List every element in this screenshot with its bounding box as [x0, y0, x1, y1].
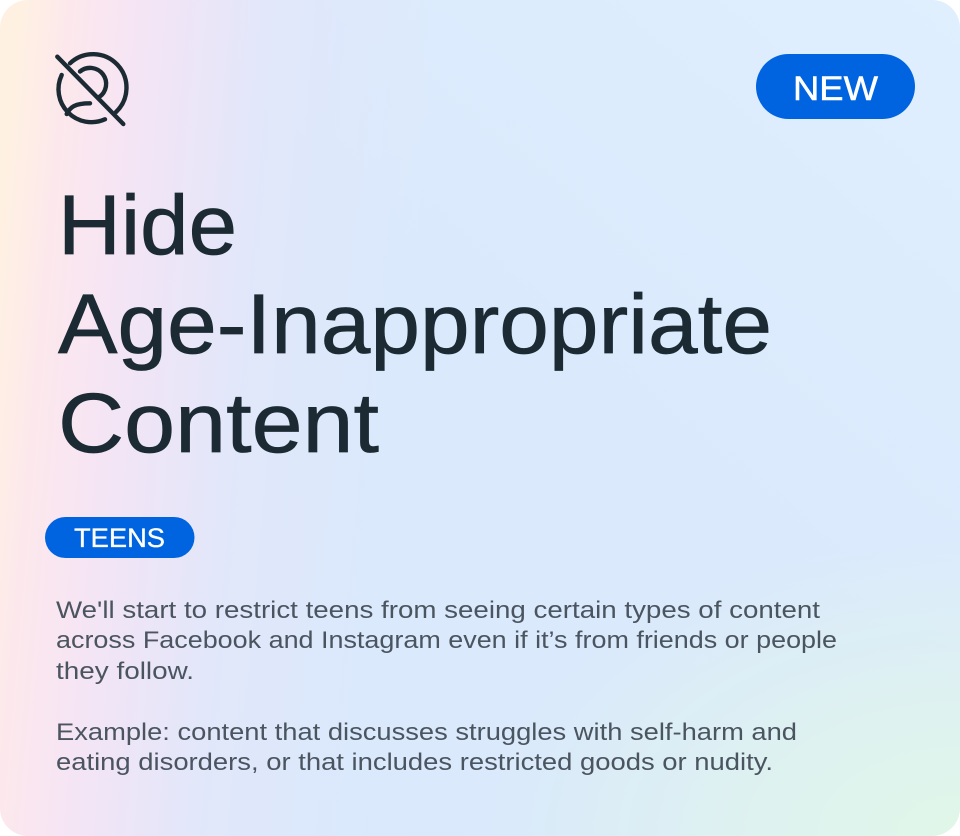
text block: restriction description: they follow. — [56, 658, 194, 685]
badge: TEENS — [45, 517, 194, 558]
title: Age-Inappropriate — [58, 277, 772, 371]
badge: NEW: NEW — [793, 70, 878, 108]
text block: example — [56, 719, 797, 776]
badge: TEENS: TEENS — [74, 523, 165, 553]
title: Content — [58, 376, 379, 470]
title: Hide — [58, 178, 237, 272]
title — [58, 178, 772, 470]
text block: restriction description: We'll start to restrict teens from seeing certain types of content — [56, 597, 820, 624]
text block: example: eating disorders, or that includes restricted goods or nudity. — [56, 749, 773, 776]
text block: example: Example: content that discusses struggles with self-harm and — [56, 719, 797, 746]
text block: restriction description: across Facebook and Instagram even if it’s from friends or people — [56, 627, 837, 654]
badge: NEW — [756, 54, 915, 119]
icon: crossed-out person — [57, 54, 126, 124]
text block: restriction description — [56, 597, 837, 685]
